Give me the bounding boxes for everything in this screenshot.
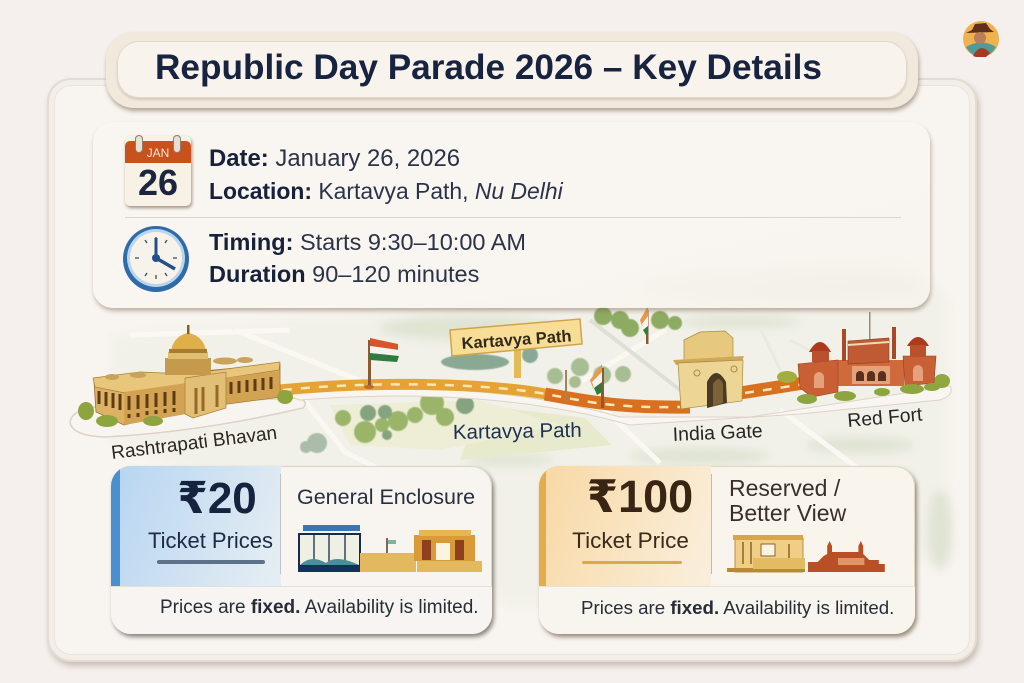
vertical divider [280,474,281,574]
timing and duration text: Duration 90–120 minutes [209,261,479,287]
label: Kartavya Path: Kartavya Path [453,419,582,444]
clock icon [123,226,189,292]
flag: centre lower [565,364,604,408]
note text: Prices are fixed. Availability is limited. [581,597,894,618]
enclosure title: General Enclosure [297,485,475,509]
amber price area [539,466,711,586]
label: Rashtrapati Bhavan: Rashtrapati Bhavan [110,423,278,464]
sign: Kartavya Path [450,319,582,378]
panel: event details [93,122,930,308]
price label: Ticket Prices [148,528,273,553]
label: Red Fort: Red Fort [847,404,924,432]
price: ₹20 [177,474,257,523]
vertical divider [711,474,712,574]
label: India Gate: India Gate [672,420,763,446]
underline [582,561,682,564]
flag: centre upper [640,306,648,344]
reserved title: Better View [729,500,846,526]
building: Red Fort [777,312,950,404]
underline [157,560,265,564]
reserved title [729,475,846,526]
building: India Gate [673,331,744,409]
title text: Republic Day Parade 2026 – Key Details [155,48,822,87]
outer panel [47,78,977,662]
ticket card: general enclosure [111,466,492,634]
timing and duration text [209,229,526,287]
date and location text: Location: Kartavya Path, Nu Delhi [209,178,563,204]
price: ₹100 [587,471,693,522]
note strip [539,586,915,635]
calendar icon: JAN [147,146,169,160]
note text: Prices are fixed. Availability is limited. [160,597,479,618]
road: Kartavya Path [280,382,810,407]
icon: reserved buildings [727,535,885,572]
title inner [117,41,907,98]
reserved title: Reserved / [729,475,840,501]
date and location text: Date: January 26, 2026 [209,145,460,172]
calendar icon [125,136,191,206]
title pill [106,32,918,108]
divider [125,217,901,218]
platform: Rashtrapati Bhavan [70,398,305,437]
trees [300,307,682,453]
sign: Kartavya Path: Kartavya Path [461,327,572,353]
ticket card: reserved [539,466,915,634]
icon: enclosure buildings [298,525,482,572]
building: Rashtrapati Bhavan [78,325,293,427]
calendar icon: 26 [138,162,178,203]
blue price area [111,466,281,586]
flag: near Rashtrapati Bhavan [364,338,399,389]
date and location text [209,145,564,204]
logo badge [963,21,999,57]
timing and duration text: Timing: Starts 9:30–10:00 AM [209,229,526,255]
note strip [111,586,492,635]
platform: India Gate and Red Fort [285,386,951,425]
price label: Ticket Price [572,528,689,553]
map background terrain [110,255,952,610]
